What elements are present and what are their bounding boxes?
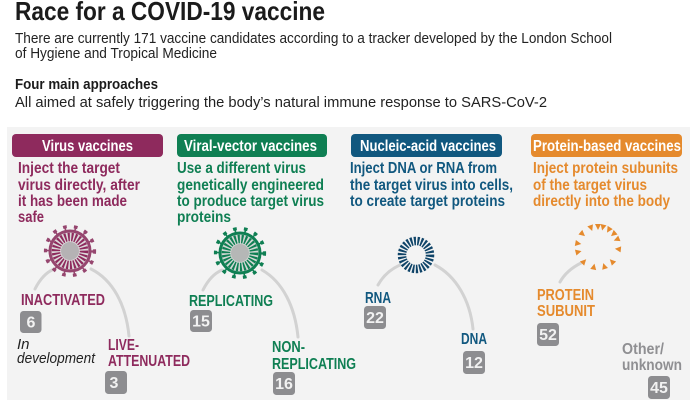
description: protein-based vaccines: directly into the body	[533, 193, 670, 210]
label: DNA: DNA	[461, 331, 487, 348]
header: nucleic-acid vaccines: Nucleic-acid vaccines	[360, 138, 496, 155]
icon: inactivated virus	[46, 226, 94, 276]
description: virus vaccines: safe	[18, 209, 44, 226]
note: in development: development	[17, 350, 96, 367]
count: replicating	[190, 310, 212, 332]
label: other/unknown	[622, 341, 682, 374]
icon: viral vector	[216, 228, 264, 278]
note: in development: In	[17, 336, 30, 353]
description: virus vaccines	[18, 160, 140, 226]
count: live-attenuated	[105, 371, 127, 394]
description: virus vaccines: Inject the target	[18, 160, 120, 177]
description: nucleic-acid vaccines: to create target proteins	[350, 193, 505, 210]
label: live-attenuated: ATTENUATED	[108, 353, 190, 370]
icon: protein subunits	[575, 224, 621, 270]
branch lines: virus vaccines	[35, 269, 129, 336]
icon: nucleic acid	[402, 241, 430, 269]
branch lines: viral-vector vaccines	[203, 270, 298, 337]
header: viral-vector vaccines: Viral-vector vaccines	[184, 138, 317, 155]
label: live-attenuated: LIVE-	[108, 337, 139, 354]
count: DNA	[463, 351, 485, 374]
branch lines: nucleic-acid vaccines	[378, 265, 473, 329]
description: viral-vector vaccines: genetically engineered	[177, 177, 324, 194]
label: non-replicating: NON-	[272, 339, 305, 356]
panel: viral-vector vaccines	[177, 134, 356, 395]
count: RNA: 22	[366, 310, 384, 327]
intro text: There are currently 171 vaccine candidates according to a tracker developed by the London School	[15, 30, 612, 47]
description: virus vaccines: virus directly, after	[18, 177, 140, 194]
panel: nucleic-acid vaccines	[350, 134, 513, 374]
header: protein-based vaccines	[531, 134, 682, 157]
header: virus vaccines: Virus vaccines	[42, 138, 133, 155]
header: viral-vector vaccines	[177, 134, 327, 157]
description: nucleic-acid vaccines: Inject DNA or RNA from	[350, 160, 497, 177]
count: protein subunit: 52	[539, 327, 557, 344]
count: inactivated: 6	[27, 314, 36, 332]
label: non-replicating: REPLICATING	[272, 356, 356, 373]
description: virus vaccines: it has been made	[18, 193, 127, 210]
subheading description: All aimed at safely triggering the body’s natural immune response to SARS-CoV-2	[15, 94, 547, 111]
description: protein-based vaccines: of the target virus	[533, 177, 647, 194]
label: other/unknown: unknown	[622, 357, 682, 374]
count: other/unknown	[648, 376, 670, 399]
label: live-attenuated	[108, 337, 190, 370]
description: viral-vector vaccines	[177, 160, 324, 226]
count: protein subunit	[537, 323, 559, 346]
intro text: of Hygiene and Tropical Medicine	[15, 45, 217, 62]
subheading: Four main approaches	[15, 76, 158, 93]
description: nucleic-acid vaccines: the target virus into cells,	[350, 177, 513, 194]
branch line: protein-based vaccines	[560, 263, 581, 282]
description: protein-based vaccines	[533, 160, 678, 210]
label: non-replicating	[272, 339, 356, 373]
count: other/unknown: 45	[650, 380, 668, 397]
panel: virus vaccines	[12, 134, 190, 394]
description: viral-vector vaccines: proteins	[177, 209, 231, 226]
label: replicating: REPLICATING	[189, 293, 273, 310]
intro text	[15, 30, 612, 62]
label: inactivated: INACTIVATED	[21, 292, 105, 309]
count: inactivated	[20, 311, 42, 333]
header: nucleic-acid vaccines	[351, 134, 502, 157]
header: virus vaccines	[12, 134, 163, 157]
description: viral-vector vaccines: Use a different virus	[177, 160, 306, 177]
label: other/unknown: Other/	[622, 341, 665, 358]
description: nucleic-acid vaccines	[350, 160, 513, 210]
note: in development	[17, 336, 96, 367]
label: protein subunit: SUBUNIT	[537, 303, 595, 320]
count: non-replicating: 16	[275, 376, 293, 393]
count: live-attenuated: 3	[110, 375, 119, 392]
label: protein subunit: PROTEIN	[537, 287, 594, 304]
count: non-replicating	[273, 372, 295, 395]
panel: protein-based vaccines	[531, 134, 682, 399]
background panel	[7, 127, 690, 400]
label: RNA: RNA	[365, 290, 391, 307]
count: DNA: 12	[465, 355, 483, 372]
count: RNA	[364, 306, 386, 329]
description: viral-vector vaccines: to produce target virus	[177, 193, 324, 210]
count: replicating: 15	[192, 314, 210, 330]
description: protein-based vaccines: Inject protein subunits	[533, 160, 678, 177]
label: protein subunit	[537, 287, 595, 320]
